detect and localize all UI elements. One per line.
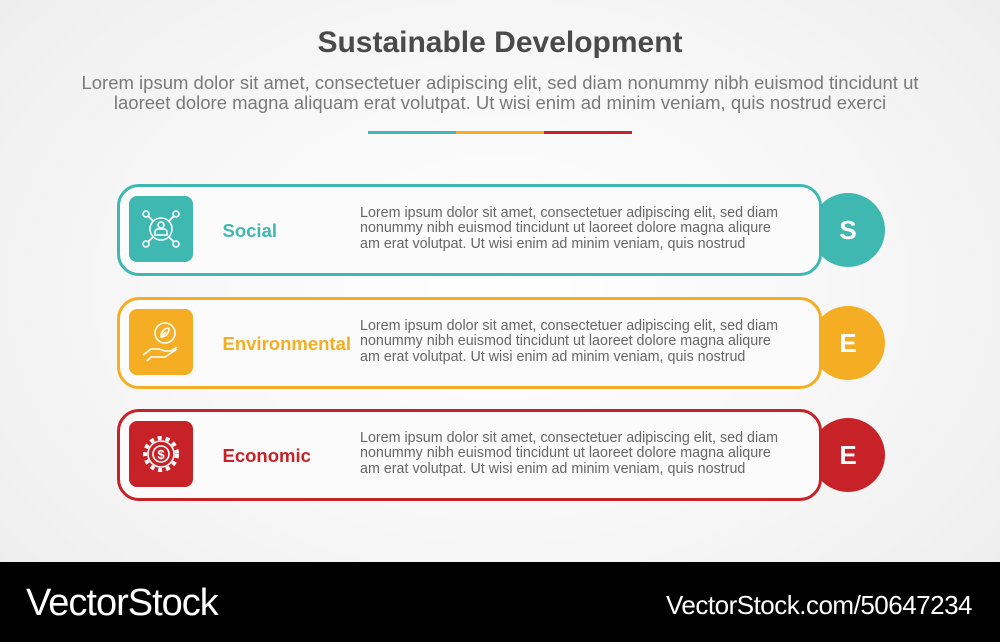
icon: network person xyxy=(128,196,192,262)
title: Sustainable Development xyxy=(317,26,683,59)
badge S xyxy=(811,193,885,267)
description: nonummy nibh euismod tincidunt ut laoreet dolore magna aliqure xyxy=(360,333,771,349)
badge E xyxy=(811,418,885,492)
description: am erat volutpat. Ut wisi enim ad minim veniam, quis nostrud xyxy=(360,236,745,252)
subtitle xyxy=(81,72,919,113)
description: Lorem ipsum dolor sit amet, consectetuer adipiscing elit, sed diam xyxy=(360,318,778,334)
subtitle: laoreet dolore magna aliquam erat volutpat. Ut wisi enim ad minim veniam, quis nostrud exerci xyxy=(114,92,886,112)
badge E: E xyxy=(839,328,857,358)
label: Economic xyxy=(222,445,311,466)
box environmental xyxy=(117,297,822,389)
row: environmental xyxy=(117,297,885,389)
description: Lorem ipsum dolor sit amet, consectetuer adipiscing elit, sed diam xyxy=(360,430,778,446)
badge E xyxy=(811,306,885,380)
description xyxy=(360,204,778,252)
badge S: S xyxy=(839,215,857,245)
icon: gear dollar xyxy=(128,421,192,487)
description: nonummy nibh euismod tincidunt ut laoreet dolore magna aliqure xyxy=(360,220,771,236)
box economic xyxy=(117,409,822,501)
description: am erat volutpat. Ut wisi enim ad minim veniam, quis nostrud xyxy=(360,460,745,476)
icon: gear dollar: $ xyxy=(157,447,165,462)
footer url: VectorStock.com/50647234 xyxy=(666,590,972,620)
label: Environmental xyxy=(222,333,351,354)
badge E: E xyxy=(839,440,857,470)
icon: hand leaf xyxy=(128,309,192,375)
description xyxy=(360,318,778,364)
description xyxy=(360,430,778,476)
footer xyxy=(0,562,1000,642)
description: nonummy nibh euismod tincidunt ut laoreet dolore magna aliqure xyxy=(360,445,771,461)
row: economic xyxy=(117,409,885,501)
box social xyxy=(117,184,822,276)
footer logo: VectorStock xyxy=(26,582,218,624)
description: am erat volutpat. Ut wisi enim ad minim veniam, quis nostrud xyxy=(360,348,745,364)
description: Lorem ipsum dolor sit amet, consectetuer adipiscing elit, sed diam xyxy=(360,204,778,220)
row: social xyxy=(117,184,885,276)
tricolor divider xyxy=(368,131,632,134)
subtitle: Lorem ipsum dolor sit amet, consectetuer adipiscing elit, sed diam nonummy nibh euismod tincidunt ut xyxy=(81,72,919,93)
label: Social xyxy=(222,220,277,241)
